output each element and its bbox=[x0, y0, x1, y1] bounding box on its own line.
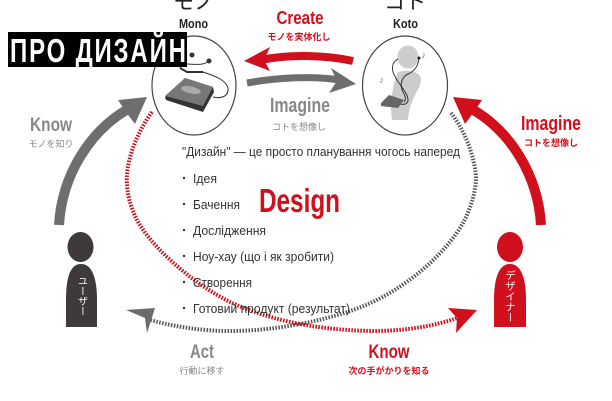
arrow: red dotted design curve bbox=[127, 112, 457, 331]
label: imagine gray bbox=[270, 95, 330, 132]
mono heading bbox=[173, 0, 215, 31]
label: create: Create bbox=[276, 8, 324, 28]
design text block: Створення bbox=[193, 275, 252, 290]
arrow: red imagine bbox=[453, 97, 541, 225]
arrow: gray dotted design curve bbox=[147, 113, 476, 331]
label: act bbox=[179, 342, 225, 376]
label: act: 行動に移す bbox=[179, 365, 225, 376]
label: know red: Know bbox=[368, 342, 410, 363]
label: imagine red: Imagine bbox=[521, 113, 581, 135]
design text block: Готовий продукт (результат) bbox=[193, 301, 350, 316]
label: create bbox=[267, 8, 331, 42]
design text block: Дослідження bbox=[193, 223, 266, 238]
label: know gray: モノを知り bbox=[28, 138, 74, 149]
label: know red bbox=[348, 342, 430, 376]
mono heading: Mono bbox=[179, 16, 208, 31]
label: know gray: Know bbox=[30, 115, 72, 136]
label: act: Act bbox=[190, 342, 215, 363]
design text block: "Дизайн" — це просто планування чогось наперед bbox=[182, 144, 460, 159]
label: imagine gray: Imagine bbox=[270, 95, 330, 117]
label: know gray bbox=[28, 115, 74, 149]
design text block: Ноу-хау (що і як зробити) bbox=[193, 249, 334, 264]
label: imagine red bbox=[521, 113, 581, 148]
koto heading: Koto bbox=[393, 16, 418, 31]
arrow: gray dotted head bbox=[126, 308, 155, 333]
figure: designer: デザイナー bbox=[504, 269, 516, 322]
circle: koto with listener icon: ♪ bbox=[421, 50, 426, 61]
design text block: Ідея bbox=[193, 171, 217, 186]
label: imagine gray: コトを想像し bbox=[272, 121, 326, 132]
circle: koto with listener icon bbox=[362, 36, 448, 135]
arrow: gray imagine bbox=[247, 68, 356, 93]
figure: user: ユーザー bbox=[76, 276, 88, 316]
arrow: red create bbox=[244, 47, 353, 71]
label: create: モノを実体化し bbox=[267, 31, 331, 42]
figure: user bbox=[66, 232, 97, 327]
design word: Design bbox=[259, 182, 340, 219]
koto heading bbox=[384, 0, 426, 31]
figure: designer bbox=[494, 232, 526, 327]
label: imagine red: コトを想像し bbox=[524, 137, 578, 148]
arrow: red dotted head bbox=[448, 308, 477, 333]
design text block bbox=[182, 144, 460, 316]
circle: koto with listener icon: ♪ bbox=[379, 75, 384, 86]
arrow: gray know bbox=[59, 97, 147, 225]
design text block: Бачення bbox=[193, 197, 240, 212]
label: know red: 次の手がかりを知る bbox=[348, 365, 430, 376]
title banner: ПРО ДИЗАЙН bbox=[10, 31, 186, 70]
circle: mono with player icon bbox=[152, 36, 236, 135]
